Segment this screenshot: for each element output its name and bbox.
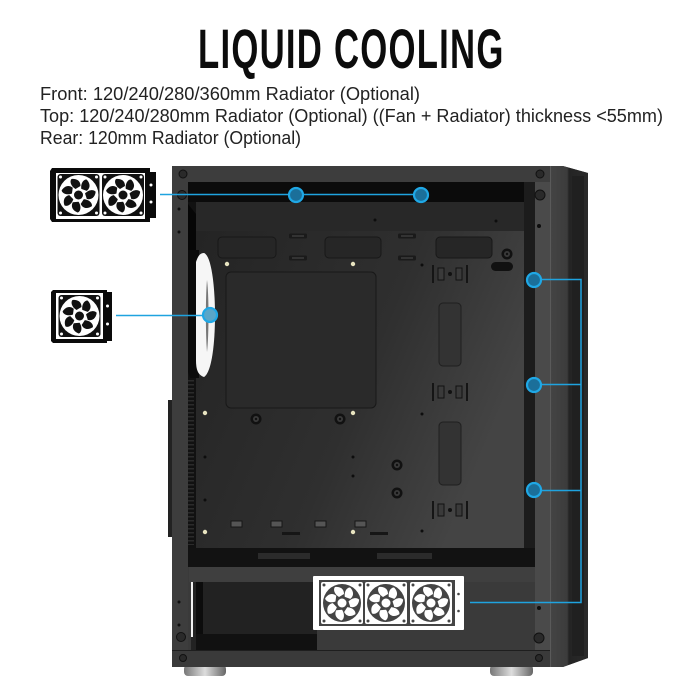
- psu bay: [191, 582, 317, 650]
- left pillar: [172, 182, 188, 667]
- small latches: [289, 234, 416, 260]
- standoffs: [203, 262, 355, 534]
- pillar holes: [178, 208, 541, 626]
- specification text: Top: 120/240/280mm Radiator (Optional) ((Fan + Radiator) thickness <55mm): [40, 106, 663, 126]
- cpu cutout: [226, 272, 376, 408]
- front panel: [550, 166, 588, 667]
- title: LIQUID COOLING: [198, 18, 505, 80]
- pc case: [168, 166, 588, 676]
- pci screws: [282, 532, 388, 535]
- rear pci slots: [231, 521, 366, 527]
- rear white fan: [196, 253, 215, 377]
- corner screws: [176, 170, 545, 662]
- connector: rear radiator: [116, 308, 217, 322]
- psu shroud: [189, 567, 535, 582]
- top dark strip: [188, 182, 535, 202]
- radiator icon: 360mm front: [313, 576, 464, 630]
- right dark strip: [524, 182, 535, 568]
- specification text: Front: 120/240/280/360mm Radiator (Optional): [40, 84, 420, 104]
- radiator icon: 240mm top: [50, 168, 156, 222]
- connector: front radiator: [470, 273, 581, 602]
- bottom bar: [172, 650, 550, 667]
- connector: top radiator: [160, 188, 428, 202]
- left dark strip: [188, 202, 196, 550]
- right pillar: [535, 182, 550, 667]
- psu vent strip: [188, 548, 535, 567]
- top cable slots: [218, 237, 492, 258]
- top bar: [172, 166, 550, 182]
- screw holes: [204, 218, 498, 532]
- top panel: [196, 202, 524, 231]
- case body: [172, 166, 588, 667]
- specification text: Rear: 120mm Radiator (Optional): [40, 128, 301, 148]
- radiator icon: 120mm rear: [51, 290, 112, 343]
- vertical cable slots: [439, 303, 461, 485]
- specification text: [40, 84, 663, 148]
- oblong slot: [491, 262, 513, 271]
- main motherboard panel: [196, 231, 524, 548]
- feet: [184, 665, 533, 676]
- rear fan mount: [188, 250, 199, 378]
- tie-down clips: [432, 265, 468, 519]
- grommets: [250, 248, 512, 498]
- rear vent: [188, 204, 196, 250]
- side bracket: [168, 400, 173, 537]
